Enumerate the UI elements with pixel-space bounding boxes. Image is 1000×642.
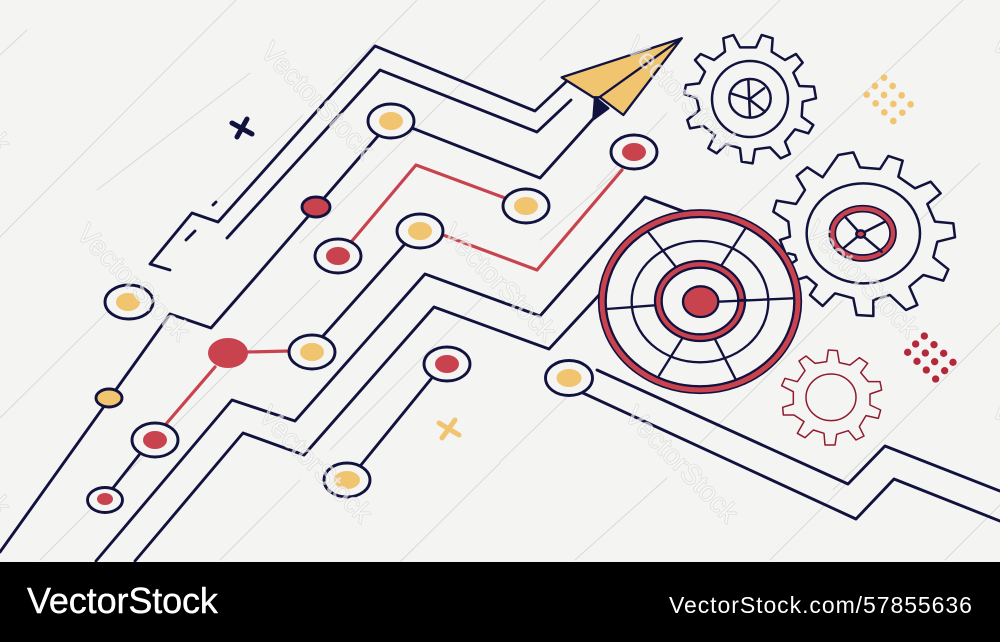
watermarks: VectorStock bbox=[620, 31, 746, 160]
node: filled orange small bbox=[96, 389, 122, 407]
node: orange mid bbox=[289, 335, 335, 369]
footer brand: VectorStock bbox=[27, 580, 218, 621]
node: red top right bbox=[611, 135, 657, 169]
node: orange bottom bbox=[324, 463, 370, 497]
footer image id: VectorStock.com/57855636 bbox=[669, 592, 973, 618]
watermarks: VectorStock bbox=[619, 400, 745, 529]
node: red bbox=[315, 239, 361, 273]
red dot cluster bbox=[904, 332, 957, 383]
watermarks: VectorStock bbox=[437, 218, 563, 347]
node: orange right bbox=[503, 189, 549, 223]
icon: navy cross bbox=[232, 119, 252, 137]
paper plane bbox=[562, 38, 682, 119]
node: filled red small bbox=[302, 197, 330, 217]
gear: large dark with red hub bbox=[773, 152, 955, 316]
icon: orange cross bbox=[439, 420, 459, 438]
footer bar bbox=[0, 562, 1000, 642]
node: red bottom centre bbox=[424, 347, 470, 381]
watermarks: VectorStock bbox=[255, 36, 381, 165]
watermarks bbox=[0, 28, 1000, 529]
watermarks: VectorStock bbox=[800, 215, 926, 344]
node: red lower bbox=[132, 423, 178, 457]
gear: top dark bbox=[684, 35, 816, 163]
target dial bbox=[599, 210, 801, 393]
node: orange beside target bbox=[546, 360, 592, 396]
node: red small lower bbox=[88, 488, 122, 512]
node: filled red large bbox=[208, 338, 248, 368]
watermarks: VectorStock bbox=[71, 218, 197, 347]
watermarks: VectorStock bbox=[253, 400, 379, 529]
red connector lines bbox=[166, 165, 622, 424]
node: orange centre bbox=[397, 214, 443, 248]
node: orange left bbox=[105, 285, 153, 319]
orange dot cluster bbox=[863, 74, 914, 124]
node: top orange bbox=[368, 104, 414, 138]
gear: small red outline bbox=[782, 350, 882, 445]
